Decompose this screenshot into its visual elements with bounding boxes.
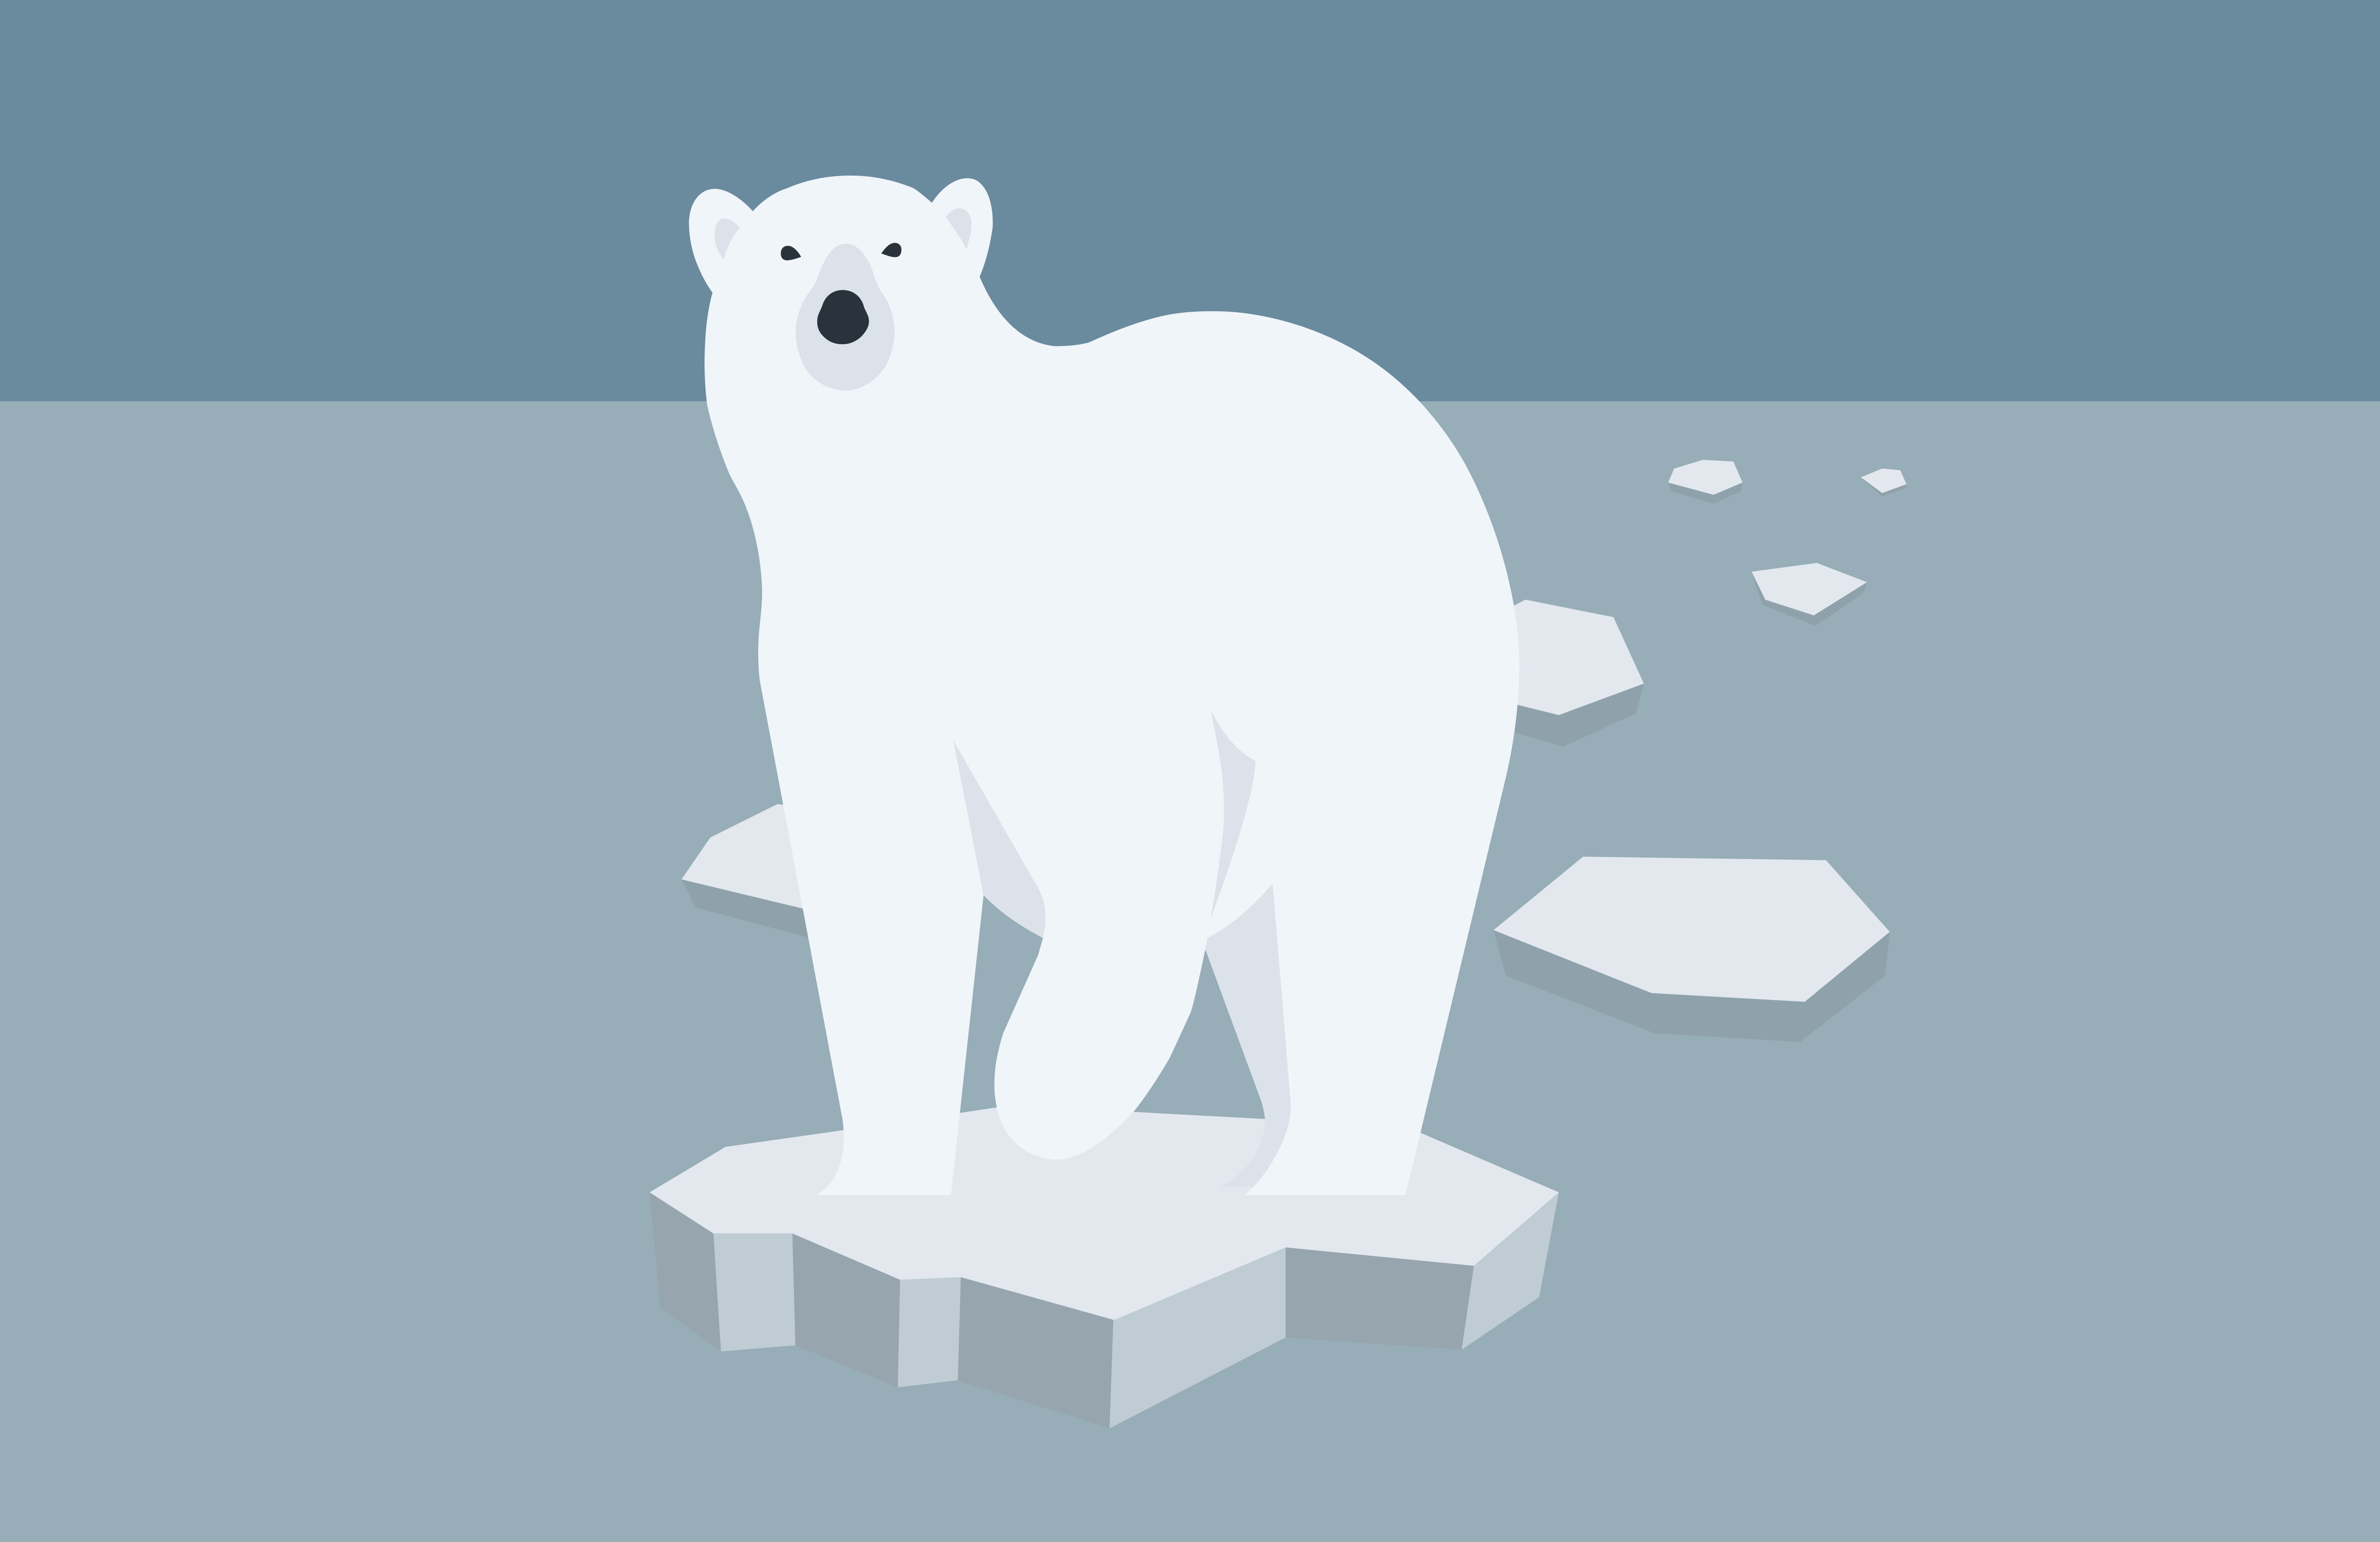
far hind leg in shadow: [1199, 883, 1305, 1187]
main ice floe: [650, 1107, 1559, 1428]
ice top surface: [650, 1107, 1559, 1320]
eye: right: [881, 243, 902, 257]
ear inner: left: [714, 218, 740, 259]
ear inner: right: [946, 208, 972, 249]
polar bear: [689, 176, 1519, 1195]
ice side faces: dark: [650, 1192, 1474, 1428]
ice floe: small far right: [1861, 468, 1906, 496]
bear body silhouette: [689, 176, 1519, 1195]
muzzle: [796, 244, 894, 391]
nose: [817, 290, 869, 344]
ice floe: behind bear left: [682, 804, 820, 940]
front leg inner shadow: [953, 740, 1045, 938]
ice floe: large right: [1494, 857, 1890, 1042]
ice floe: small middle: [1752, 563, 1867, 626]
ice floe: behind bear right: [1495, 600, 1644, 747]
ice side faces: light: [714, 1192, 1559, 1428]
background: sky: [0, 0, 2380, 401]
eye: left: [781, 246, 801, 260]
hind leg inner shadow: [1210, 709, 1256, 919]
ice floe: small upper: [1668, 460, 1743, 504]
background: water: [0, 401, 2380, 1542]
